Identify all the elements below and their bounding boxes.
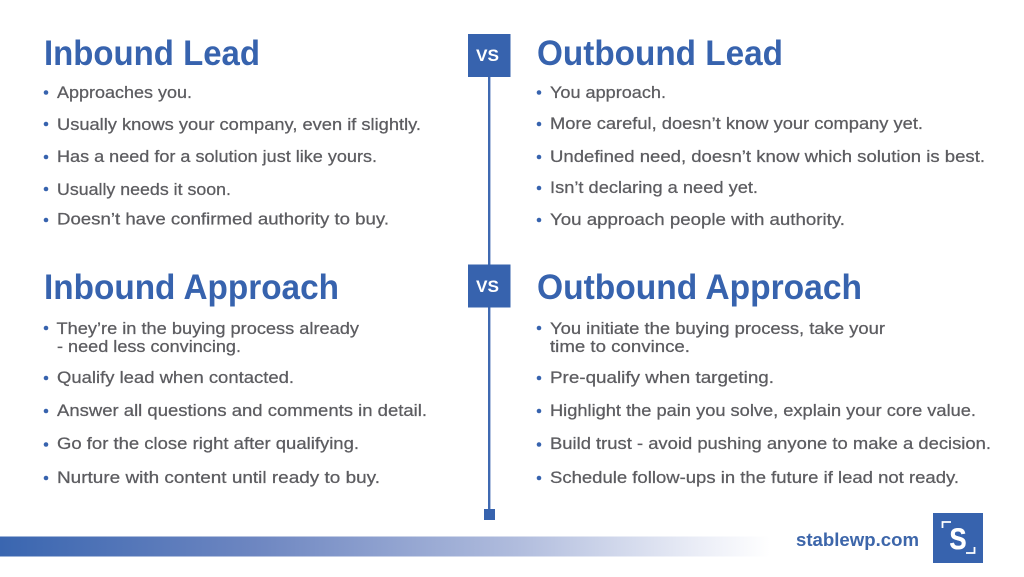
list: outbound approach points: Schedule follow-ups in the future if lead not ready.	[550, 469, 959, 487]
list: outbound lead points: You approach people with authority.	[550, 211, 845, 229]
VS badge top: VS	[476, 46, 499, 65]
list: outbound lead points: Undefined need, doesn’t know which solution is best.	[550, 148, 985, 166]
list: inbound approach points: Go for the close right after qualifying.	[57, 435, 359, 453]
icon: stablewp logo: S	[950, 523, 966, 556]
VS badge top	[468, 34, 510, 77]
panel: outbound lead	[537, 34, 985, 229]
list: inbound lead points: Doesn’t have confirmed authority to buy.	[57, 210, 389, 228]
list: outbound lead points: More careful, doesn’t know your company yet.	[550, 115, 923, 133]
list: outbound approach points	[537, 320, 991, 487]
list: outbound approach points: time to convince.	[550, 338, 690, 356]
heading: outbound lead: Outbound Lead	[537, 34, 783, 73]
list: inbound approach points: Answer all questions and comments in detail.	[57, 402, 427, 420]
list: outbound approach points: You initiate the buying process, take your	[550, 320, 886, 338]
list: inbound approach points: - need less convincing.	[57, 338, 241, 356]
list: inbound lead points	[44, 84, 421, 228]
list: outbound lead points: You approach.	[550, 84, 666, 102]
list: inbound lead points: Approaches you.	[57, 84, 192, 102]
heading: outbound approach: Outbound Approach	[537, 268, 862, 307]
list: inbound lead points: Usually needs it soon.	[57, 181, 231, 199]
list: outbound approach points: Pre-qualify when targeting.	[550, 369, 774, 387]
list: inbound lead points: Has a need for a solution just like yours.	[57, 148, 377, 166]
panel: outbound approach	[537, 268, 991, 487]
list: inbound lead points: Usually knows your company, even if slightly.	[57, 116, 421, 134]
website label: stablewp.com	[796, 530, 919, 550]
list: inbound approach points	[44, 320, 427, 487]
list: inbound approach points: Qualify lead when contacted.	[57, 369, 294, 387]
VS badge bottom: VS	[476, 277, 499, 296]
list: inbound approach points: They’re in the buying process already	[56, 320, 360, 338]
footer gradient bar	[0, 536, 770, 556]
heading: inbound approach: Inbound Approach	[44, 268, 339, 307]
icon: stablewp logo	[933, 513, 983, 563]
list: outbound approach points: Highlight the pain you solve, explain your core value.	[550, 402, 976, 420]
heading: inbound lead: Inbound Lead	[44, 34, 260, 73]
panel: inbound lead	[44, 34, 421, 228]
VS badge bottom	[468, 264, 510, 308]
list: outbound lead points: Isn’t declaring a need yet.	[550, 179, 758, 197]
list: outbound lead points	[537, 84, 985, 229]
center timeline line	[484, 70, 495, 520]
panel: inbound approach	[44, 268, 427, 487]
list: inbound approach points: Nurture with content until ready to buy.	[57, 469, 380, 487]
list: outbound approach points: Build trust - avoid pushing anyone to make a decision.	[550, 435, 991, 453]
